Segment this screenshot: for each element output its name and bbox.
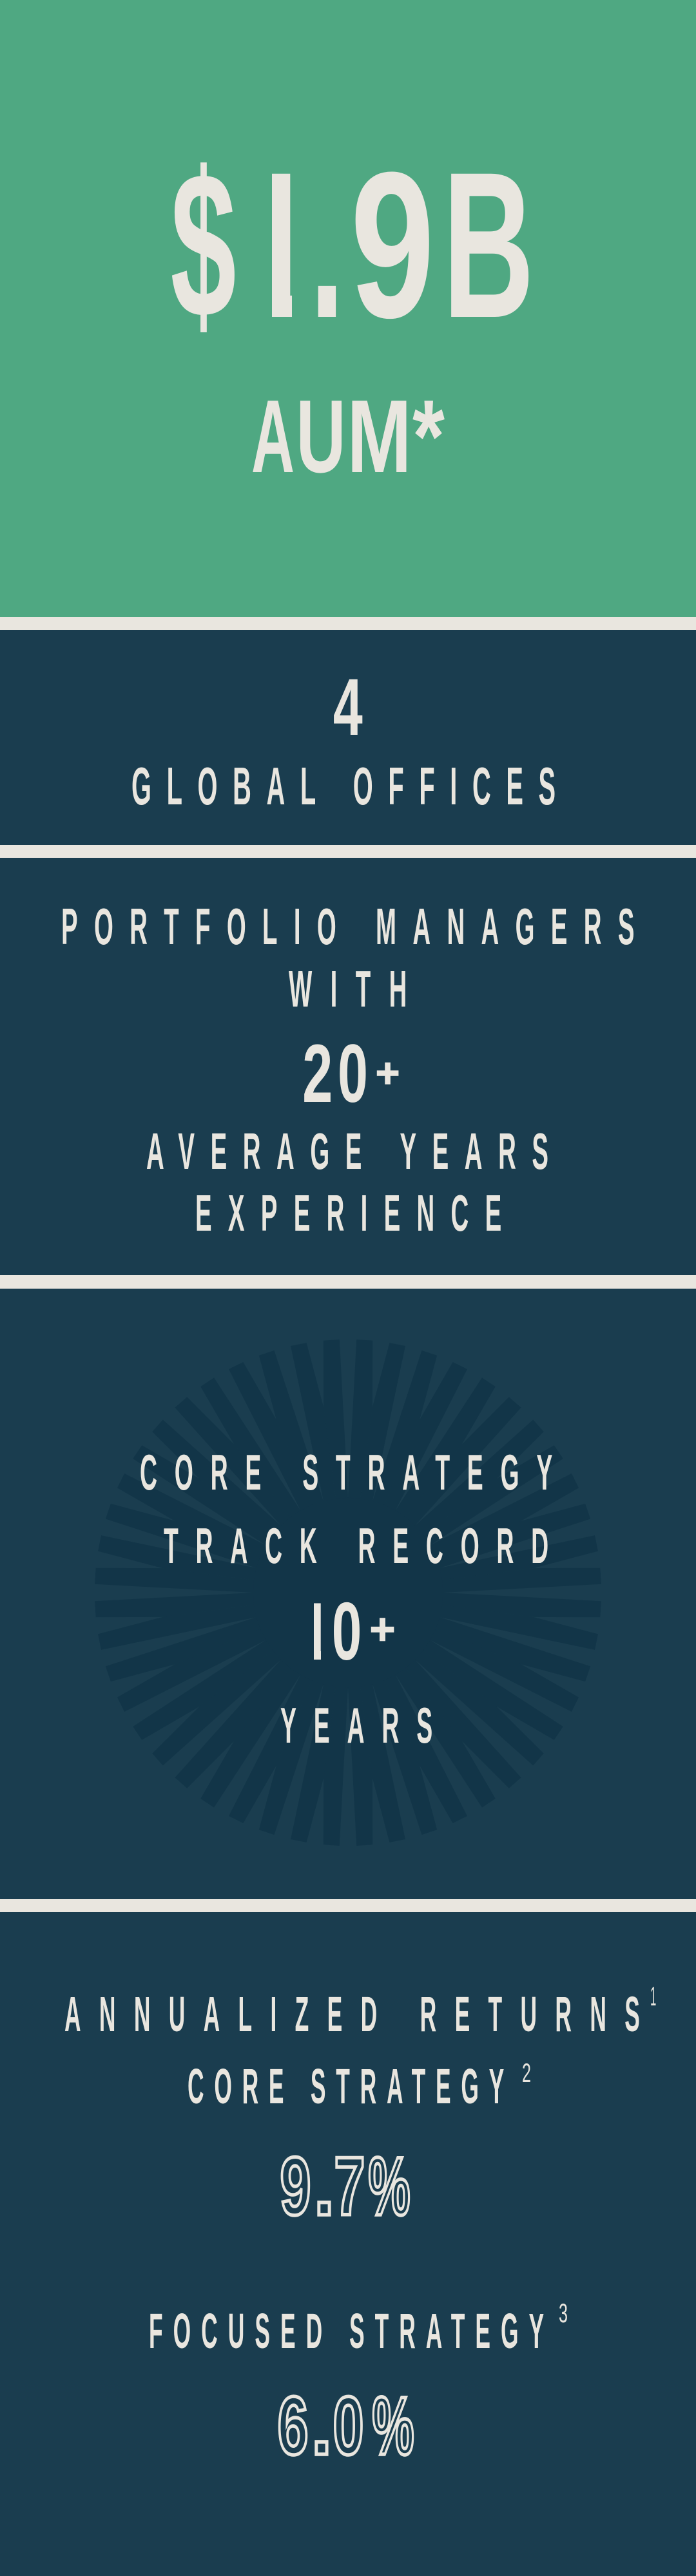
track record number — [293, 1586, 395, 1677]
panel: global offices — [0, 630, 696, 845]
focused strategy label: FOCUSED STRATEGY — [149, 2304, 544, 2359]
headline number: 9 — [351, 129, 434, 361]
returns heading: ANNUALIZED RETURNS — [64, 1987, 640, 2042]
focused strategy return: 0 — [333, 2380, 363, 2472]
headline number — [170, 129, 534, 361]
focused strategy return: % — [372, 2380, 414, 2472]
experience number: 20 — [302, 1027, 368, 1119]
headline number: 1 — [238, 129, 316, 361]
focused strategy return: 6 — [277, 2380, 308, 2472]
headline number: . — [309, 129, 344, 361]
track record label line 1: CORE STRATEGY — [140, 1444, 552, 1501]
experience label line 2: EXPERIENCE — [195, 1185, 501, 1242]
experience label line 1: AVERAGE YEARS — [146, 1123, 548, 1180]
panel: annualized returns — [0, 1912, 696, 2576]
AUM label: U — [296, 379, 345, 495]
managers label line 2: WITH — [289, 961, 407, 1018]
track record unit: YEARS — [280, 1698, 432, 1754]
footnote 2: 2 — [522, 2059, 531, 2088]
core strategy return: % — [369, 2141, 410, 2233]
panel: portfolio managers — [0, 858, 696, 1275]
core strategy label: CORE STRATEGY — [188, 2059, 504, 2114]
offices number: 4 — [333, 663, 363, 752]
panel: track record — [0, 1289, 696, 1899]
AUM label: A — [251, 379, 295, 495]
experience number — [302, 1027, 400, 1119]
offices label: GLOBAL OFFICES — [131, 756, 556, 816]
footnote 3: 3 — [559, 2299, 568, 2329]
core strategy return: . — [314, 2141, 334, 2233]
managers label line 1: PORTFOLIO MANAGERS — [61, 898, 634, 956]
core strategy return: 9 — [280, 2141, 311, 2233]
panel: assets under management — [0, 0, 696, 617]
headline number: $ — [170, 129, 236, 361]
core strategy return: 7 — [334, 2141, 365, 2233]
experience number: + — [376, 1050, 400, 1096]
focused strategy return: . — [311, 2380, 332, 2472]
footnote 1: 1 — [650, 1981, 656, 2011]
track record label line 2: TRACK RECORD — [164, 1518, 548, 1574]
headline number: B — [443, 129, 534, 361]
AUM label: * — [412, 379, 445, 495]
track record number: 10 — [301, 1586, 362, 1677]
AUM label: M — [347, 379, 411, 495]
icon: sunburst — [93, 1338, 603, 1847]
track record number: + — [370, 1605, 395, 1654]
